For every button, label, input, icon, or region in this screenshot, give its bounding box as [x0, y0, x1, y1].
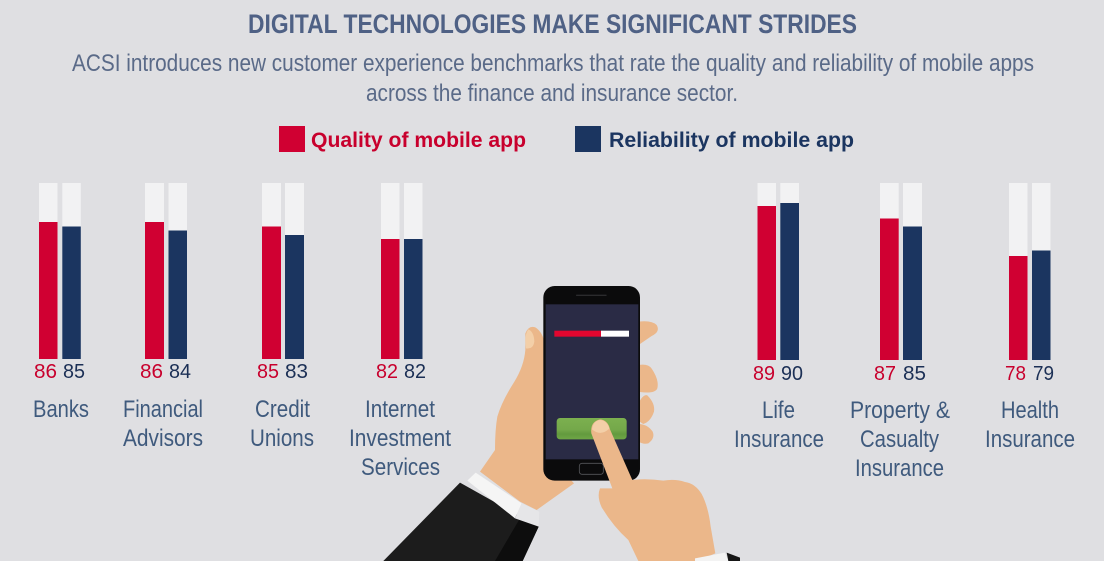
suit sleeve [383, 483, 539, 561]
chart: health insurance: 78 [1005, 363, 1026, 385]
chart: life insurance: 89 [753, 363, 775, 385]
left hand [480, 327, 574, 510]
title: DIGITAL TECHNOLOGIES MAKE SIGNIFICANT STRIDES [248, 9, 857, 39]
illustration: hands holding a phone [383, 286, 740, 561]
chart: internet investment services [349, 183, 451, 481]
chart: financial advisors: Advisors [123, 425, 203, 452]
chart: financial advisors: 86 [140, 361, 163, 383]
chart: life insurance: Life [762, 397, 795, 424]
chart: life insurance: Insurance [734, 426, 824, 453]
chart: financial advisors [123, 183, 203, 452]
chart: credit unions [250, 183, 314, 452]
right shirt cuff [695, 553, 728, 561]
chart: internet investment services: Internet [365, 396, 435, 423]
legend: quality: Quality of mobile app [311, 129, 526, 152]
chart: credit unions: 85 [257, 361, 279, 383]
chart: credit unions: 83 [285, 361, 308, 383]
chart: financial advisors: 84 [169, 361, 191, 383]
chart: health insurance: Health [1001, 397, 1059, 424]
chart: internet investment services: Services [361, 454, 440, 481]
chart: property and casualty insurance: Insurance [855, 455, 944, 482]
thumb nail [525, 329, 534, 348]
intro text: across the finance and insurance sector. [366, 80, 738, 107]
legend: reliability: Reliability of mobile app [609, 129, 854, 152]
chart: health insurance: 79 [1033, 363, 1054, 385]
chart: health insurance [985, 183, 1075, 453]
fingers behind phone [635, 321, 658, 444]
chart: property and casualty insurance: 85 [903, 363, 926, 385]
chart: banks: Banks [33, 396, 89, 423]
chart: property and casualty insurance: 87 [874, 363, 896, 385]
phone speaker [576, 295, 607, 296]
green button [557, 418, 627, 439]
chart: life insurance [734, 183, 824, 453]
right hand with pointing finger [591, 419, 715, 561]
chart: credit unions: Unions [250, 425, 314, 452]
chart: banks [33, 183, 89, 423]
shirt cuff [467, 473, 539, 527]
chart: property and casualty insurance [850, 183, 950, 482]
chart: internet investment services: Investment [349, 425, 451, 452]
chart: internet investment services: 82 [376, 361, 398, 383]
chart: property and casualty insurance: Casualty [860, 426, 939, 453]
phone screen [546, 304, 638, 459]
legend [279, 126, 854, 152]
chart: health insurance: Insurance [985, 426, 1075, 453]
chart: life insurance: 90 [781, 363, 803, 385]
chart: banks: 86 [34, 361, 57, 383]
chart: credit unions: Credit [255, 396, 310, 423]
progress bar [554, 331, 629, 337]
chart: property and casualty insurance: Property & [850, 397, 950, 424]
intro text [72, 50, 1034, 107]
chart: financial advisors: Financial [123, 396, 203, 423]
phone [543, 286, 640, 481]
chart: internet investment services: 82 [404, 361, 426, 383]
right sleeve [727, 553, 740, 561]
phone home button [579, 463, 603, 474]
chart: banks: 85 [63, 361, 85, 383]
fingertip nail [592, 420, 609, 433]
